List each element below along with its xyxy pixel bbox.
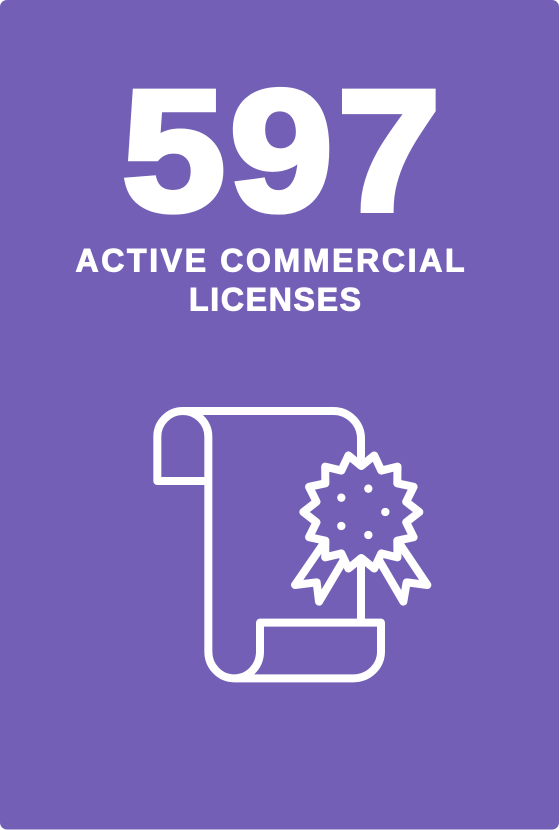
- rosette dots: [337, 484, 389, 539]
- caption: ACTIVE COMMERCIAL: [76, 242, 464, 278]
- icon: certificate scroll with rosette: [157, 411, 427, 678]
- caption: LICENSES: [189, 282, 361, 318]
- big number: 597: [122, 54, 445, 247]
- caption: [76, 242, 464, 318]
- rosette: [303, 455, 419, 569]
- scroll outline: [157, 411, 381, 678]
- ribbon tails: [295, 544, 427, 602]
